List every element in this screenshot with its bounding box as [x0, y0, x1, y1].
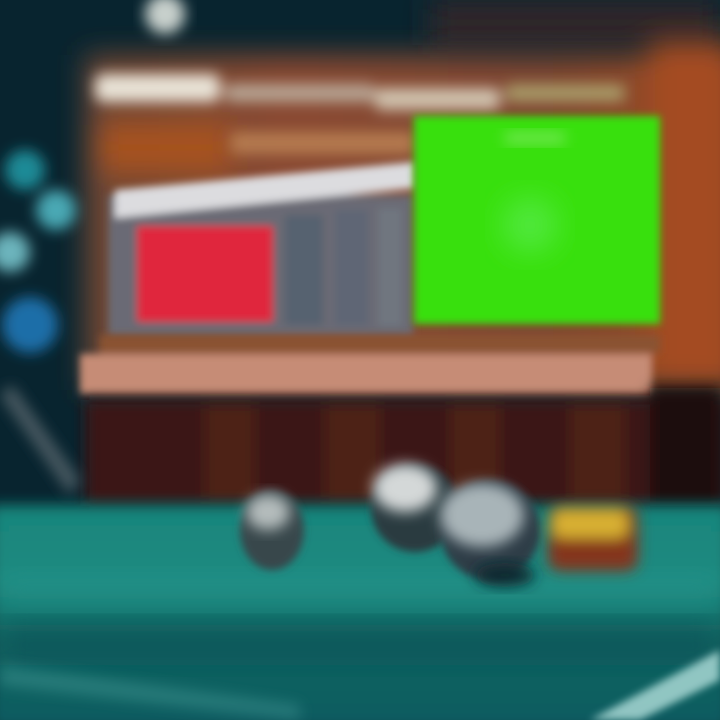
cue stick: [0, 385, 80, 495]
panel: board: [108, 162, 415, 337]
panel: green: [414, 116, 660, 324]
grey columns: [285, 215, 323, 325]
heading blur: white title band: [95, 74, 625, 154]
table: [0, 505, 720, 720]
icon: floating hexagons: [0, 150, 76, 353]
icon: red and yellow block: [548, 505, 638, 571]
icon: top ball: [145, 0, 185, 34]
lower wall with slats: [85, 388, 720, 506]
icon: balls: [240, 464, 540, 587]
shelf: [80, 335, 660, 394]
red panel: [137, 226, 273, 322]
header strip: [115, 162, 415, 218]
wall: [85, 40, 720, 390]
